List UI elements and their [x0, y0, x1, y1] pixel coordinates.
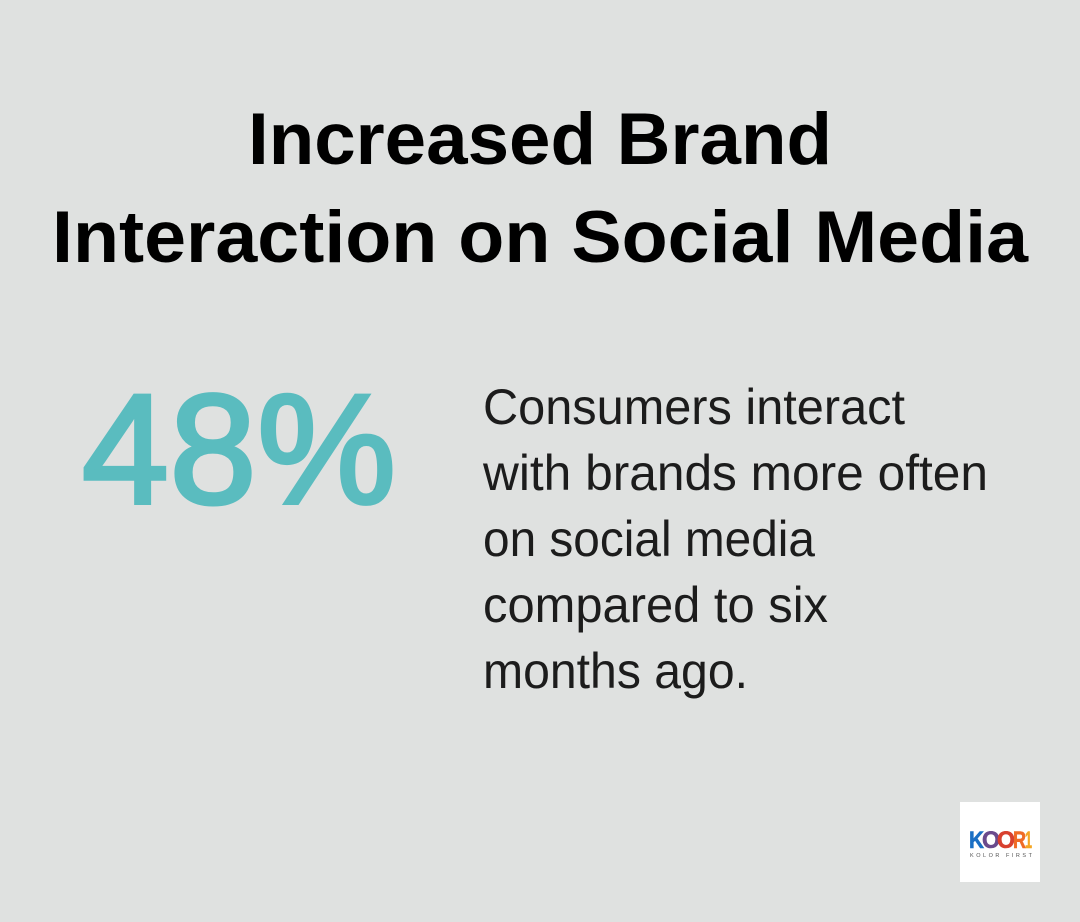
description text: Consumers interact	[483, 379, 905, 435]
title: Interaction on Social Media	[52, 197, 1029, 278]
logo: KOOR1 Kolor First: KOLOR FIRST	[970, 853, 1033, 859]
logo: KOOR1 Kolor First: O	[997, 827, 1015, 854]
description text: months ago.	[483, 643, 748, 699]
statistic: 48%: 48%	[82, 363, 396, 537]
logo: KOOR1 Kolor First: O	[982, 827, 1000, 854]
title	[52, 99, 1029, 278]
logo: KOOR1 Kolor First	[960, 802, 1040, 882]
logo: KOOR1 Kolor First: K	[969, 827, 985, 854]
title: Increased Brand	[248, 99, 832, 180]
description text: on social media	[483, 511, 815, 567]
description text: with brands more often	[482, 445, 988, 501]
description text: compared to six	[483, 577, 828, 633]
description text	[482, 379, 988, 699]
logo: KOOR1 Kolor First: 1	[1025, 827, 1032, 854]
logo: KOOR1 Kolor First: R	[1013, 827, 1026, 854]
